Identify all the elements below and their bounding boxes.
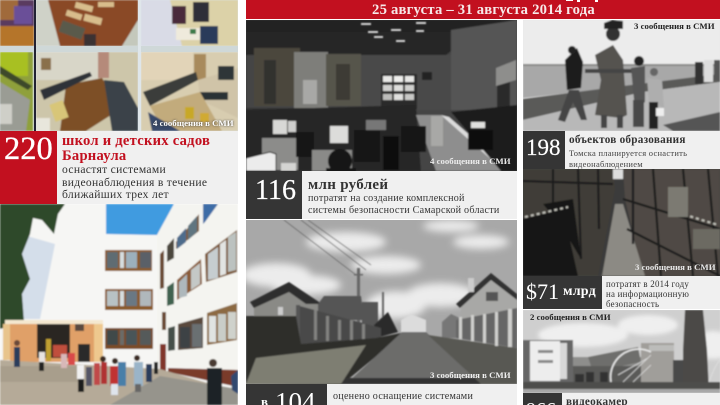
windows right wing xyxy=(176,214,199,249)
media count caption: 4 сообщения в СМИ xyxy=(430,156,511,166)
header banner: date range xyxy=(246,0,720,19)
stat block: 116 million rubles xyxy=(246,171,517,219)
windows centre xyxy=(105,250,152,271)
media count caption: 3 сообщения в СМИ xyxy=(430,370,511,380)
dark number box: $71 xyxy=(526,279,559,304)
heading: Барнаула xyxy=(62,148,126,164)
ground xyxy=(0,360,238,405)
dark number box xyxy=(246,171,302,219)
photo: monument on embankment xyxy=(523,20,720,131)
heading: школ и детских садов xyxy=(62,133,210,149)
description: оценено оснащение системами xyxy=(333,391,473,402)
photo: CCTV camera grid of classrooms xyxy=(0,0,238,131)
media count caption: 2 сообщения в СМИ xyxy=(530,312,611,322)
description: потратят на создание комплексной xyxy=(308,193,465,204)
photo: server corridor xyxy=(523,169,720,276)
description xyxy=(62,163,207,201)
description: потратят в 2014 году xyxy=(606,279,689,289)
description: на информационную xyxy=(606,289,689,299)
media count caption: 3 сообщения в СМИ xyxy=(634,21,715,31)
red number box: 220 xyxy=(4,131,53,167)
heading xyxy=(62,133,210,164)
dark number box xyxy=(523,276,602,309)
header banner: date range: 25 августа – 31 августа 2014 года xyxy=(372,2,595,18)
dark number box: 198 xyxy=(526,135,560,160)
stat block: 104 xyxy=(246,384,517,405)
stat block: video cameras xyxy=(523,393,720,405)
stat block: 71 billion dollars xyxy=(523,276,720,309)
description: видеонаблюдением xyxy=(569,159,643,169)
dark number box: 116 xyxy=(255,175,296,206)
heading: млн рублей xyxy=(308,177,388,193)
stat block: 220 schools xyxy=(0,131,238,204)
dark number box: млрд xyxy=(563,284,596,299)
children xyxy=(14,339,158,395)
description: системы безопасности Самарской области xyxy=(308,205,500,216)
photo: control room xyxy=(246,20,517,171)
dark number box xyxy=(523,393,562,405)
description xyxy=(308,193,500,216)
heading: объектов образования xyxy=(569,134,686,146)
description xyxy=(606,279,689,309)
description: Томска планируется оснастить xyxy=(569,148,687,158)
photo: rural street xyxy=(246,220,517,384)
description xyxy=(569,148,687,169)
media count caption: 3 сообщения в СМИ xyxy=(635,262,716,272)
red number box xyxy=(0,131,57,204)
dark number box xyxy=(523,131,565,169)
photo: school building xyxy=(0,204,238,405)
description: видеонаблюдения в течение xyxy=(62,176,207,189)
dark number box xyxy=(246,384,327,405)
media count caption: 4 сообщения в СМИ xyxy=(153,118,234,128)
stat block: 198 education facilities xyxy=(523,131,720,169)
description: ближайших трех лет xyxy=(62,188,169,201)
description: оснастят системами xyxy=(62,163,166,176)
photo: city plaza with tower xyxy=(523,310,720,393)
